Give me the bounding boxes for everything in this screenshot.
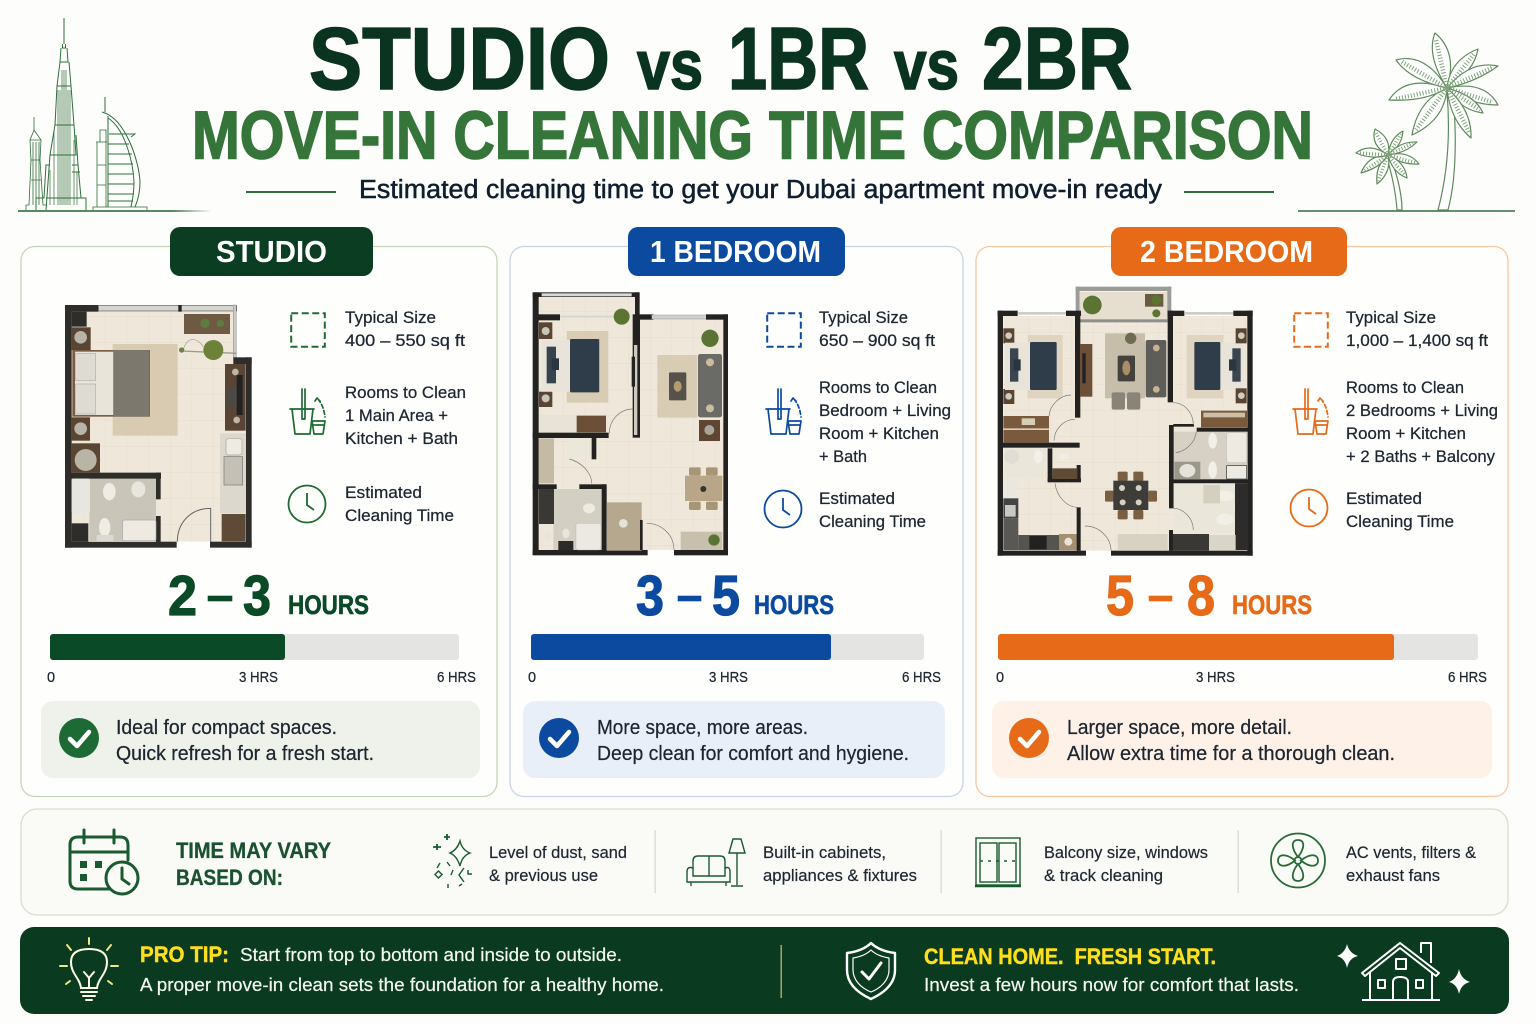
callout: 2 bedroom: Larger space, more detail. — [1067, 717, 1292, 739]
hours: 2-3 — [168, 564, 369, 628]
hours: 2-3: 2 — [168, 564, 197, 628]
icon: palm trees — [1298, 33, 1515, 212]
icon: bucket — [290, 389, 325, 434]
text: rooms to clean: + 2 Baths + Balcony — [1346, 447, 1495, 466]
text: dust and sand: Level of dust, sand — [489, 843, 627, 862]
text: balcony: Balcony size, windows — [1044, 843, 1208, 862]
hours: 3-5: 5 — [712, 564, 740, 628]
text: pro tip: A proper move-in clean sets the foundation for a healthy home. — [140, 974, 664, 995]
text: estimated time: Cleaning Time — [1346, 512, 1454, 531]
heading: time may vary: TIME MAY VARY — [176, 838, 331, 863]
bar chart: 2 bedroom time: 0 — [996, 670, 1004, 686]
text: estimated time — [819, 489, 926, 531]
icon: bucket — [766, 389, 801, 434]
callout: studio — [41, 701, 480, 778]
icon: balcony window — [975, 838, 1021, 886]
bar chart: 2 bedroom time — [996, 634, 1487, 686]
icon: calendar and clock — [70, 830, 138, 894]
text: typical size — [345, 308, 465, 350]
icon: clock — [288, 486, 326, 522]
text: rooms to clean: 1 Main Area + — [345, 406, 448, 425]
hours: 5-8: HOURS — [1232, 590, 1312, 620]
text: clean home: Invest a few hours now for comfort that lasts. — [924, 974, 1299, 995]
tagline with side rules: Estimated cleaning time to get your Dubai apartment move-in ready — [359, 176, 1162, 204]
callout: 2 bedroom: Allow extra time for a thorough clean. — [1067, 743, 1395, 765]
icon: dust sparkles — [433, 834, 472, 888]
panel: time may vary — [21, 809, 1508, 915]
text: rooms to clean: Room + Kitchen — [1346, 424, 1466, 443]
subtitle heading: move-in cleaning time comparison: MOVE-IN CLEANING TIME COMPARISON — [192, 98, 1313, 174]
icon: typical size — [1294, 313, 1328, 347]
bar chart: 1 bedroom time: 6 HRS — [902, 670, 941, 686]
text: rooms to clean — [1346, 378, 1498, 466]
bar chart: 1 bedroom time: 3 HRS — [709, 670, 748, 686]
bar chart: studio time: 3 HRS — [239, 670, 278, 686]
icon: house with sparkles — [1337, 943, 1470, 1000]
hours: 5-8: 8 — [1187, 564, 1215, 628]
text: typical size: Typical Size — [345, 308, 436, 327]
text: rooms to clean: Rooms to Clean — [345, 383, 466, 402]
hours: 2-3: 3 — [243, 564, 271, 628]
text: rooms to clean: Bedroom + Living — [819, 401, 951, 420]
text: typical size: Typical Size — [819, 308, 908, 327]
badge: studio — [170, 227, 373, 276]
icon: Dubai skyline — [18, 18, 212, 212]
callout: 1 bedroom: More space, more areas. — [597, 717, 808, 739]
text: AC vents — [1346, 843, 1477, 885]
title line: studio vs 1BR vs 2BR: 1BR — [728, 9, 869, 108]
icon: clock — [1290, 490, 1328, 526]
text: clean home: CLEAN HOME. FRESH START. — [924, 944, 1216, 969]
callout: studio: Ideal for compact spaces. — [116, 717, 337, 739]
icon: shield — [847, 943, 895, 999]
icon: light bulb — [60, 938, 118, 1000]
hours: 3-5: 3 — [636, 564, 664, 628]
title line: studio vs 1BR vs 2BR: vs — [637, 26, 703, 104]
title line: studio vs 1BR vs 2BR — [309, 9, 1132, 108]
text: estimated time — [1346, 489, 1454, 531]
text: AC vents: AC vents, filters & — [1346, 843, 1477, 862]
text: built-ins — [763, 843, 917, 885]
text: pro tip: PRO TIP: — [140, 942, 229, 967]
hours: 2-3: HOURS — [288, 590, 369, 620]
text: AC vents: exhaust fans — [1346, 866, 1440, 885]
icon: clock — [764, 490, 802, 528]
badge: 1 bedroom — [628, 227, 845, 276]
bar chart: 1 bedroom time: 0 — [528, 670, 536, 686]
hours: 5-8 — [1106, 564, 1312, 628]
text: rooms to clean — [345, 383, 466, 448]
panel: 1 bedroom — [510, 227, 963, 796]
text: rooms to clean: 2 Bedrooms + Living — [1346, 401, 1498, 420]
text: estimated time: Cleaning Time — [345, 506, 454, 525]
icon: fan — [1271, 834, 1325, 888]
icon: typical size — [767, 313, 801, 347]
title line: studio vs 1BR vs 2BR: STUDIO — [309, 9, 610, 108]
bar chart: 2 bedroom time: 6 HRS — [1448, 670, 1487, 686]
text: balcony: & track cleaning — [1044, 866, 1163, 885]
text: rooms to clean: Room + Kitchen — [819, 424, 939, 443]
floor plan: 2 bedroom — [998, 287, 1253, 556]
bar chart: 1 bedroom time — [528, 634, 941, 686]
bar chart: 2 bedroom time: 3 HRS — [1196, 670, 1235, 686]
text: estimated time: Estimated — [1346, 489, 1422, 508]
callout: 2 bedroom — [992, 701, 1492, 778]
text: pro tip — [140, 942, 664, 995]
text: typical size: 1,000 – 1,400 sq ft — [1346, 331, 1488, 350]
floor plan: 1 bedroom — [533, 292, 728, 555]
title line: studio vs 1BR vs 2BR: 2BR — [982, 9, 1132, 108]
callout: studio: Quick refresh for a fresh start. — [116, 743, 374, 765]
text: estimated time: Cleaning Time — [819, 512, 926, 531]
badge: 1 bedroom: 1 BEDROOM — [650, 234, 821, 269]
panel: studio — [21, 227, 497, 796]
title line: studio vs 1BR vs 2BR: vs — [894, 26, 959, 104]
hours: 3-5 — [636, 564, 834, 628]
text: estimated time: Estimated — [819, 489, 895, 508]
text: rooms to clean: + Bath — [819, 447, 867, 466]
text: built-ins: Built-in cabinets, — [763, 843, 886, 862]
text: rooms to clean: Rooms to Clean — [1346, 378, 1464, 397]
text: estimated time — [345, 483, 454, 525]
banner: pro tip — [20, 927, 1509, 1014]
text: built-ins: appliances & fixtures — [763, 866, 917, 885]
icon: bucket — [1293, 389, 1328, 434]
bar chart: studio time: 0 — [47, 670, 55, 686]
text: estimated time: Estimated — [345, 483, 422, 502]
hours: 3-5: HOURS — [754, 590, 834, 620]
callout: 1 bedroom: Deep clean for comfort and hygiene. — [597, 743, 909, 765]
text: pro tip: Start from top to bottom and inside to outside. — [240, 944, 622, 965]
text: dust and sand: & previous use — [489, 866, 598, 885]
text: rooms to clean: Rooms to Clean — [819, 378, 937, 397]
text: rooms to clean: Kitchen + Bath — [345, 429, 458, 448]
text: typical size: Typical Size — [1346, 308, 1436, 327]
panel: 2 bedroom — [976, 227, 1508, 796]
text: typical size: 400 – 550 sq ft — [345, 331, 465, 350]
heading: time may vary — [176, 838, 331, 890]
hours: 5-8: 5 — [1106, 564, 1134, 628]
floor plan: studio — [65, 305, 252, 548]
text: balcony — [1044, 843, 1208, 885]
text: typical size: 650 – 900 sq ft — [819, 331, 935, 350]
text: dust and sand — [489, 843, 627, 885]
badge: studio: STUDIO — [216, 234, 327, 269]
badge: 2 bedroom: 2 BEDROOM — [1140, 234, 1313, 269]
icon: typical size — [291, 313, 325, 347]
badge: 2 bedroom — [1111, 227, 1347, 276]
text: clean home — [924, 944, 1299, 995]
text: rooms to clean — [819, 378, 951, 466]
bar chart: studio time — [47, 634, 476, 686]
bar chart: studio time: 6 HRS — [437, 670, 476, 686]
text: typical size — [1346, 308, 1488, 350]
heading: time may vary: BASED ON: — [176, 865, 283, 890]
text: typical size — [819, 308, 935, 350]
icon: sofa and lamp — [687, 839, 745, 886]
callout: 1 bedroom — [523, 701, 945, 778]
